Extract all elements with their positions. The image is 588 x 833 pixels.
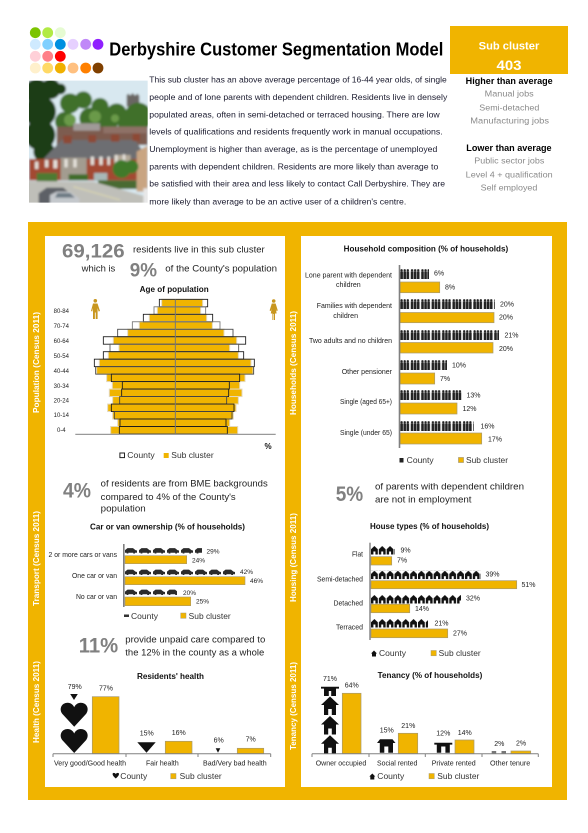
household composition bar chart: 20% <box>500 302 514 308</box>
age pyramid legend: County <box>127 451 155 460</box>
age pyramid chart <box>54 299 276 451</box>
icon: female figure <box>270 299 278 320</box>
car ownership legend <box>124 612 231 621</box>
car ownership bar chart: 2 or more cars or vans <box>48 550 117 559</box>
logo: coloured dots <box>30 27 103 73</box>
house types heading: House types (% of households) <box>370 522 489 531</box>
county house bars <box>321 687 506 754</box>
age pyramid legend: Sub cluster <box>171 451 214 460</box>
health legend: Sub cluster <box>180 772 222 781</box>
intro paragraph: be satisfied with their area and less likely to contact Call Derbyshire. They are <box>149 179 445 189</box>
tenancy legend: Sub cluster <box>437 772 480 781</box>
county heart bars <box>61 694 220 753</box>
age axis labels: 80-84 <box>54 309 70 315</box>
sub cluster bars <box>342 693 531 754</box>
household composition heading: Household composition (% of households) <box>344 244 509 254</box>
BME stat callout: population <box>101 504 146 514</box>
residents' health bar chart: 16% <box>172 730 186 737</box>
household composition bar chart: 20% <box>499 346 513 353</box>
household composition bar chart: Single (aged 65+) <box>340 397 392 406</box>
household legend <box>400 456 508 465</box>
side label: population: Population (Census 2011) <box>31 312 41 413</box>
higher and lower than average lists: Higher than average <box>466 76 553 86</box>
car ownership bar chart: 42% <box>240 569 253 576</box>
house types bar chart: 39% <box>486 572 500 578</box>
household composition bar chart: 16% <box>480 424 495 430</box>
residents' health bar chart: 7% <box>246 736 256 744</box>
age axis labels: 70-74 <box>54 324 70 330</box>
house types bar chart: 21% <box>434 620 449 628</box>
side label: transport: Transport (Census 2011) <box>31 511 41 606</box>
side label: health: Health (Census 2011) <box>31 661 41 743</box>
household composition bar chart: 10% <box>452 362 466 370</box>
icon: male figure <box>91 299 100 319</box>
population headline stats: 9% <box>130 261 157 282</box>
age axis labels: 10-14 <box>54 413 70 419</box>
household composition bar chart: Single (under 65) <box>340 428 392 437</box>
household composition bar chart: 21% <box>504 332 519 340</box>
sub cluster badge: Sub cluster <box>479 40 540 52</box>
photo: terraced street <box>29 80 148 203</box>
intro paragraph: parents with dependent children. Residents are more likely than average to <box>149 162 439 172</box>
side label: households: Households (Census 2011) <box>288 311 298 415</box>
age axis labels: 40-44 <box>54 369 70 375</box>
tenancy bar chart: 15% <box>380 728 394 734</box>
tenancy bar chart: 12% <box>436 730 450 738</box>
residents' health bar chart: Fair health <box>146 758 179 768</box>
tenancy legend: County <box>377 772 404 781</box>
population headline stats: which is <box>81 264 116 274</box>
tenancy bar chart: 2% <box>516 740 526 748</box>
age axis labels: 50-54 <box>54 354 70 360</box>
household composition bar chart: children <box>336 280 361 289</box>
household composition bar chart <box>305 265 519 448</box>
age axis labels: 30-34 <box>54 384 70 390</box>
household legend: Sub cluster <box>466 456 508 465</box>
higher and lower than average lists: Semi-detached <box>479 103 540 113</box>
car ownership bar chart: One car or van <box>72 571 117 580</box>
side label: housing: Housing (Census 2011) <box>288 513 298 602</box>
unpaid care stat callout <box>79 635 265 658</box>
car ownership bar chart: 25% <box>196 598 209 606</box>
household legend: County <box>407 456 434 465</box>
higher and lower than average lists: Level 4 + qualification <box>466 170 553 180</box>
unpaid care stat callout: the 12% in the county as a whole <box>125 647 264 657</box>
unpaid care stat callout: provide unpaid care compared to <box>125 635 265 645</box>
tenancy bar chart: Other tenure <box>490 758 530 768</box>
residents' health bar chart: 79% <box>68 684 82 691</box>
tenancy bar chart: 64% <box>345 682 359 690</box>
BME stat callout: compared to 4% of the County's <box>101 492 236 502</box>
house types bar chart: 7% <box>397 558 407 564</box>
health legend: County <box>120 772 147 781</box>
residents' health bar chart: 77% <box>99 686 113 692</box>
residents' health bar chart <box>53 684 271 768</box>
car ownership legend: County <box>131 612 158 621</box>
side label: tenancy: Tenancy (Census 2011) <box>288 662 298 750</box>
tenancy bar chart <box>312 676 538 768</box>
tenancy heading: Tenancy (% of households) <box>378 671 483 680</box>
car ownership bar chart: No car or van <box>76 592 117 601</box>
BME stat callout: of residents are from BME backgrounds <box>101 479 268 489</box>
household composition bar chart: children <box>333 311 358 320</box>
house types bar chart: 9% <box>400 548 411 554</box>
employment stat callout: of parents with dependent children <box>375 481 524 491</box>
house types bar chart: Flat <box>352 550 363 558</box>
BME stat callout: 4% <box>63 480 91 503</box>
tenancy bar chart: Social rented <box>377 758 417 768</box>
tenancy bar chart: 71% <box>323 676 337 683</box>
tenancy bar chart: Owner occupied <box>316 758 366 768</box>
age axis labels: 60-64 <box>54 339 70 345</box>
title: Derbyshire Customer Segmentation Model <box>109 40 443 60</box>
house types bar chart <box>317 543 536 640</box>
household composition bar chart: 8% <box>445 284 455 292</box>
house types bar chart: 32% <box>466 596 480 602</box>
house types bar chart: Semi-detached <box>317 574 363 584</box>
higher and lower than average lists: Self employed <box>481 183 538 193</box>
residents' health bar chart: Very good/Good health <box>54 758 126 768</box>
sub cluster bars <box>97 299 253 434</box>
tenancy bar chart: 14% <box>458 730 472 737</box>
house types bar chart: 14% <box>415 606 429 613</box>
higher and lower than average lists: Public sector jobs <box>474 156 544 166</box>
intro paragraph: levels of qualifications and residents frequently work in manual occupations. <box>149 127 443 137</box>
house types legend: County <box>379 649 406 658</box>
car ownership bar chart: 24% <box>192 558 205 564</box>
population headline stats: of the County's population <box>165 264 277 274</box>
sub cluster badge <box>450 26 568 74</box>
household composition bar chart: Two adults and no children <box>309 336 392 345</box>
higher and lower than average lists <box>466 76 553 193</box>
household composition bar chart: 7% <box>440 376 450 383</box>
employment stat callout <box>336 481 524 506</box>
house types bar chart: Terraced <box>336 622 363 632</box>
tenancy bar chart: Private rented <box>432 758 476 768</box>
pyramid bars <box>94 299 254 434</box>
house types legend <box>371 649 481 658</box>
age pyramid heading: Age of population <box>140 285 209 294</box>
tenancy legend <box>369 772 480 781</box>
population headline stats <box>62 242 277 282</box>
intro paragraph <box>149 75 448 207</box>
age axis labels: 0-4 <box>57 428 66 434</box>
household composition bar chart: Other pensioner <box>342 367 393 376</box>
house types bar chart: 27% <box>453 630 467 638</box>
unpaid care stat callout: 11% <box>79 635 119 658</box>
household composition bar chart: 6% <box>434 270 444 278</box>
employment stat callout: 5% <box>336 483 363 506</box>
household composition bar chart: Lone parent with dependent <box>305 270 392 280</box>
age pyramid chart: % <box>264 442 272 451</box>
panel: right white column <box>301 236 552 787</box>
residents' health bar chart: Bad/Very bad health <box>203 758 267 768</box>
population headline stats: residents live in this sub cluster <box>133 245 265 255</box>
house types bar chart: Detached <box>334 598 363 608</box>
household composition bar chart: 20% <box>499 314 513 322</box>
car ownership bar chart: 20% <box>183 590 196 597</box>
household composition bar chart: Families with dependent <box>317 301 392 310</box>
yellow background frame <box>28 222 567 800</box>
household composition bar chart: 12% <box>462 406 477 413</box>
intro paragraph: more likely than average to be an active user of a children's centre. <box>149 197 406 207</box>
house types legend: Sub cluster <box>439 649 481 658</box>
BME stat callout <box>63 479 268 514</box>
sub cluster bars <box>92 697 264 754</box>
higher and lower than average lists: Manual jobs <box>485 89 534 99</box>
health heading: Residents' health <box>137 672 204 681</box>
tenancy bar chart: 21% <box>401 723 415 730</box>
residents' health bar chart: 15% <box>140 730 154 738</box>
age axis labels: 20-24 <box>54 398 70 404</box>
age pyramid legend <box>120 451 214 460</box>
higher and lower than average lists: Manufacturing jobs <box>470 116 549 126</box>
car ownership bar chart: 29% <box>206 548 220 556</box>
employment stat callout: are not in employment <box>375 495 472 505</box>
intro paragraph: people and of lone parents with dependent children. Residents live in densely <box>149 92 448 102</box>
house types bar chart: 51% <box>522 582 536 589</box>
car ownership heading: Car or van ownership (% of households) <box>90 522 245 531</box>
car ownership bar chart: 46% <box>250 578 263 585</box>
household composition bar chart: 13% <box>466 392 481 400</box>
intro paragraph: Unemployment is higher than average, as is the percentage of unemployed <box>149 144 438 154</box>
residents' health bar chart: 6% <box>214 738 224 744</box>
sub cluster badge: 403 <box>496 57 522 73</box>
car ownership bar chart <box>48 544 263 607</box>
population headline stats: 69,126 <box>62 242 125 263</box>
intro paragraph: populated areas, often in semi-detached or terraced housing. There are low <box>149 110 441 120</box>
higher and lower than average lists: Lower than average <box>466 143 552 153</box>
car ownership legend: Sub cluster <box>189 612 231 621</box>
household composition bar chart: 17% <box>488 436 502 444</box>
county outline bars <box>94 299 254 434</box>
tenancy bar chart: 2% <box>494 741 504 748</box>
health legend <box>113 772 222 781</box>
age axis labels <box>54 309 70 434</box>
intro paragraph: This sub cluster has an above average percentage of 16-44 year olds, of single <box>149 75 447 85</box>
panel: left white column <box>45 236 285 787</box>
